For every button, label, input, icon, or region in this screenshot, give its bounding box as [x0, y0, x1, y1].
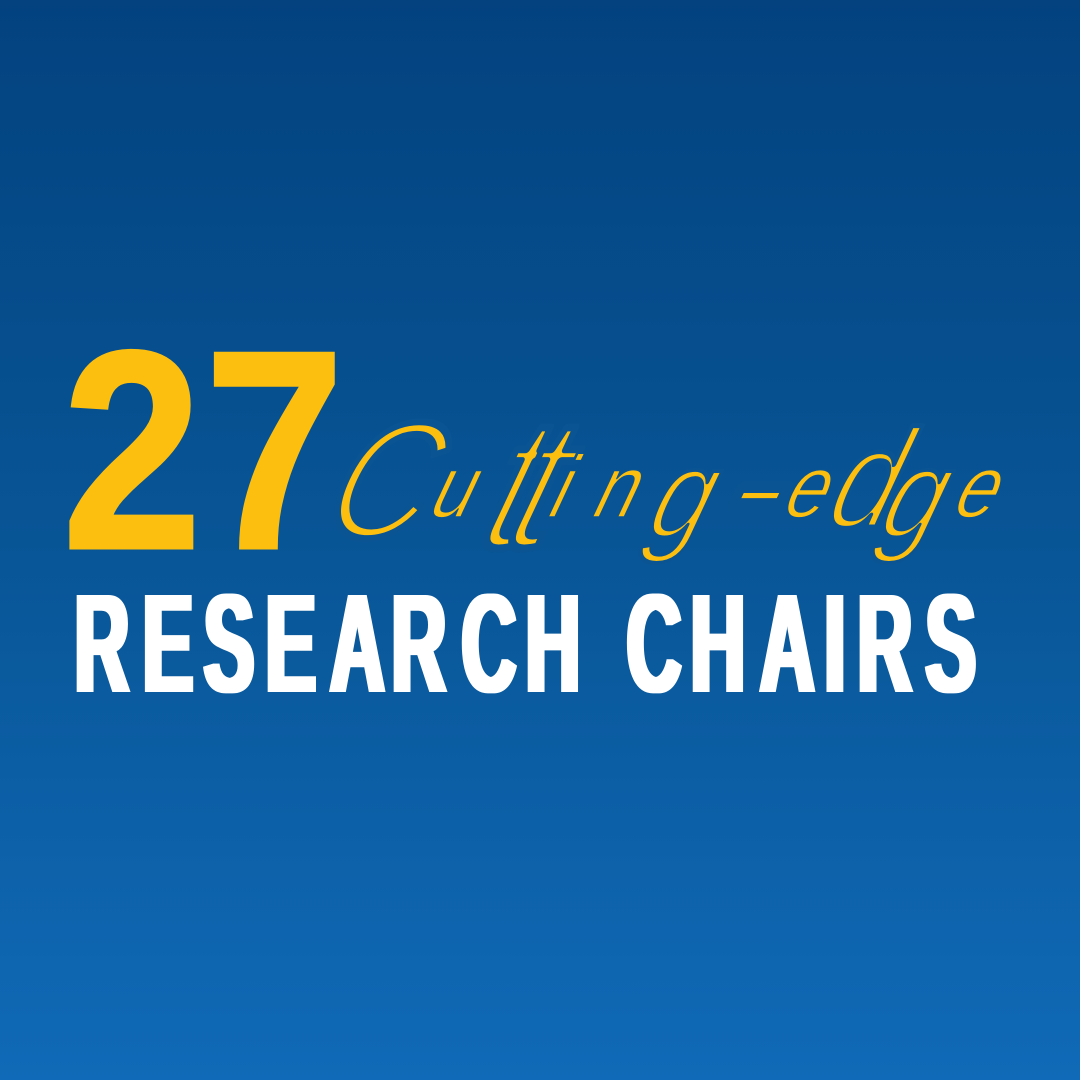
script heading: Cutting-edge: e: [939, 439, 1026, 536]
script heading: Cutting-edge: C: [296, 389, 483, 573]
script heading: Cutting-edge: i: [534, 439, 596, 536]
script heading: Cutting-edge: t: [450, 379, 591, 587]
script heading: Cutting-edge: g: [626, 425, 750, 564]
script heading: Cutting-edge: d: [803, 401, 942, 557]
script heading: Cutting-edge: g: [859, 425, 982, 564]
script heading: Cutting-edge: n: [578, 439, 665, 536]
script heading: Cutting-edge: t: [476, 379, 616, 587]
heading number: 27: 27: [62, 291, 344, 608]
script heading: Cutting-edge: u: [415, 439, 502, 536]
script heading: Cutting-edge: -: [680, 355, 857, 601]
heading: RESEARCH CHAIRS: RESEARCH CHAIRS: [75, 565, 976, 722]
script heading: Cutting-edge: e: [769, 439, 856, 536]
